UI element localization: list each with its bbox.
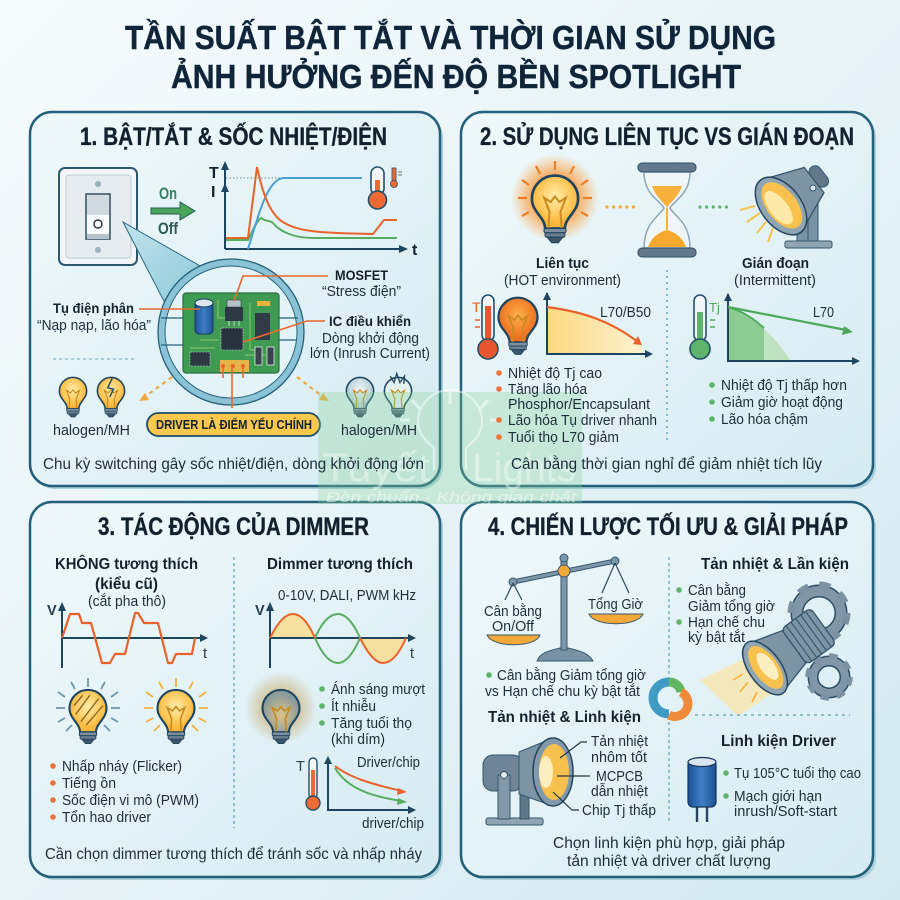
watermark: Tuyết (322, 446, 430, 490)
label: intermittent: Gián đoạn (742, 255, 809, 272)
list: intermittent effects: Lão hóa chậm (721, 412, 808, 428)
label: halogen/MH right: halogen/MH (341, 423, 417, 439)
label: continuous: Liên tục (536, 255, 589, 272)
list: driver parts (723, 766, 861, 820)
label: control IC: lớn (Inrush Current) (310, 346, 430, 362)
magnifier with driver board (158, 259, 304, 405)
list: continuous effects (496, 366, 657, 446)
icon: gears (791, 585, 850, 698)
label: MOSFET: “Stress điện” (322, 284, 401, 300)
subheading: compatible: Dimmer tương thích (267, 556, 413, 573)
watermark: Lights (472, 446, 576, 490)
chart: temperature and current over time: t (412, 242, 418, 259)
label: MOSFET (322, 267, 401, 300)
arrow: on off: Off (158, 219, 178, 238)
chart: chopped waveform: V (47, 603, 57, 619)
list: continuous effects: Lão hóa Tụ driver nhanh (508, 413, 657, 429)
label: intermittent: (Intermittent) (734, 273, 816, 289)
dots green (700, 205, 727, 209)
chart: temperature and current over time (209, 161, 418, 259)
text: balance note (485, 667, 646, 700)
list: compatible benefits: (khi dím) (331, 732, 385, 748)
label: control IC (310, 313, 430, 362)
list: heat strategy (676, 582, 775, 646)
list: incompatible effects: Sốc điện vi mô (PWM) (62, 793, 199, 809)
label: MOSFET: MOSFET (335, 267, 388, 283)
list: intermittent effects: Nhiệt độ Tj thấp hơn (721, 378, 847, 394)
callout wedge (123, 222, 202, 307)
icon: cool thermometer: Tj (709, 300, 720, 315)
text: balance note: Cân bằng Giảm tổng giờ (497, 667, 646, 684)
heading 3: 3. TÁC ĐỘNG CỦA DIMMER (98, 511, 369, 541)
list: heat strategy: Hạn chế chu (688, 615, 765, 631)
chart: smooth waveform: t (410, 646, 414, 662)
icon: glowing bulb (511, 154, 599, 243)
chart: temperature and current over time: T (209, 165, 219, 182)
panel 3: dimmer (30, 502, 443, 880)
lamp labels: Chip Tj thấp (582, 803, 656, 819)
list: compatible benefits: Tăng tuổi thọ (331, 716, 412, 732)
icon: flickering bulb (56, 678, 120, 744)
icon: hourglass (638, 163, 696, 257)
badge: driver weak point (147, 413, 320, 436)
chart: L70 (724, 293, 860, 365)
chart: smooth waveform: V (255, 603, 265, 619)
panel 1: on/off shock (30, 112, 443, 489)
footer 4: Chọn linh kiện phù hợp, giải pháp (553, 835, 785, 852)
lamp labels: MCPCB (596, 769, 643, 785)
icon: hot thermometer: T (472, 299, 481, 315)
subheading: incompatible (55, 554, 198, 610)
icon: dimmed bulb (245, 672, 317, 744)
label: intermittent (734, 255, 816, 289)
list: compatible benefits (319, 681, 425, 748)
list: intermittent effects (709, 378, 847, 428)
chart: L70/B50 (543, 292, 653, 358)
icon: halogen bulbs broken (346, 374, 412, 417)
list: continuous effects: Tăng lão hóa (508, 382, 588, 398)
list: continuous effects: Phosphor/Encapsulant (508, 397, 650, 413)
list: driver parts: Mạch giới hạn (734, 789, 822, 805)
chart: driver/chip temperature: Driver/chip (357, 755, 420, 771)
icon: balance scale: On/Off (492, 619, 535, 635)
footer 2: Cân bằng thời gian nghỉ để giảm nhiệt tích lũy (511, 454, 822, 473)
icon: bright bulb (144, 678, 208, 744)
list: incompatible effects: Nhấp nháy (Flicker) (62, 759, 182, 775)
list: compatible benefits: Ít nhiễu (331, 698, 376, 715)
watermark: Đèn chuẩn - Không gian chất (326, 489, 577, 506)
icon: halogen bulbs ok (53, 377, 130, 439)
chart: temperature and current over time: I (211, 184, 215, 201)
lamp labels: dẫn nhiệt (591, 783, 648, 800)
footer 4: tản nhiệt và driver chất lượng (567, 853, 771, 870)
label: control IC: IC điều khiển (329, 313, 411, 329)
icon: balance scale (484, 554, 643, 661)
icon: balance scale: Tổng Giờ (588, 597, 643, 613)
arrow: on off (151, 184, 195, 238)
list: incompatible effects: Tiếng ồn (62, 776, 116, 792)
icon: balance scale: Cân bằng (484, 603, 542, 620)
icon: hot thermometer (472, 295, 498, 359)
title (125, 19, 776, 95)
subheading: incompatible: (cắt pha thô) (88, 593, 166, 610)
dashed arrows (139, 377, 329, 401)
subheading: heat top right: Tản nhiệt & Lần kiện (701, 556, 849, 573)
chart: chopped waveform: t (203, 646, 207, 662)
chart: driver/chip temperature: driver/chip (362, 816, 424, 832)
icon: thermometers (368, 167, 402, 209)
panel 2: continuous vs intermittent (461, 112, 876, 489)
lamp labels (553, 734, 656, 819)
list: driver parts: inrush/Soft-start (734, 804, 837, 820)
subheading: driver parts: Linh kiện Driver (721, 733, 836, 750)
heading 1: 1. BẬT/TẮT & SỐC NHIỆT/ĐIỆN (80, 121, 387, 151)
lamp labels: Tản nhiệt (591, 734, 648, 750)
label: capacitor (37, 300, 151, 334)
badge: driver weak point: DRIVER LÀ ĐIỂM YẾU CHÍNH (156, 417, 312, 432)
list: heat strategy: Giảm tổng giờ (688, 599, 775, 615)
arrow: on off: On (159, 184, 177, 203)
title: ẢNH HƯỞNG ĐẾN ĐỘ BỀN SPOTLIGHT (171, 57, 741, 95)
text: balance note: vs Hạn chế chu kỳ bật tắt (485, 683, 640, 700)
list: heat strategy: kỳ bật tắt (688, 629, 745, 646)
subheading: incompatible: (kiểu cũ) (95, 575, 158, 593)
subheading: compatible: 0-10V, DALI, PWM kHz (278, 588, 416, 604)
list: intermittent effects: Giảm giờ hoạt động (721, 395, 843, 411)
subheading: compatible (267, 556, 416, 604)
callout leaders (139, 276, 328, 408)
dots orange (607, 205, 634, 209)
watermark (318, 390, 582, 506)
list: continuous effects: Nhiệt độ Tj cao (508, 366, 602, 382)
subheading: heat and parts: Tản nhiệt & Linh kiện (488, 709, 641, 726)
chart: chopped waveform (47, 602, 208, 668)
footer 4 (553, 835, 785, 870)
list: incompatible effects (50, 759, 199, 826)
list: continuous effects: Tuổi thọ L70 giảm (508, 430, 619, 446)
icon: cycle ring (653, 682, 688, 716)
list: driver parts: Tụ 105°C tuổi thọ cao (734, 766, 861, 782)
label: capacitor: “Nạp nạp, lão hóa” (37, 318, 151, 334)
chart: smooth waveform (255, 602, 416, 668)
chart: driver/chip temperature: T (296, 759, 305, 775)
title: TẦN SUẤT BẬT TẮT VÀ THỜI GIAN SỬ DỤNG (125, 19, 776, 56)
icon: spotlight with beam (700, 601, 841, 716)
icon: cool thermometer (690, 295, 720, 359)
list: compatible benefits: Ánh sáng mượt (331, 681, 425, 698)
icon: hot orange bulb (498, 298, 538, 354)
list: incompatible effects: Tổn hao driver (62, 810, 151, 826)
label: continuous (504, 255, 621, 289)
label: continuous: (HOT environment) (504, 273, 621, 289)
list: heat strategy: Cân bằng (688, 582, 746, 599)
subheading: incompatible: KHÔNG tương thích (55, 554, 198, 573)
icon: lamp cross section (483, 738, 573, 825)
icon: halogen bulbs ok: halogen/MH (53, 423, 130, 439)
chart: L70/B50: L70/B50 (600, 305, 651, 321)
chart: driver/chip temperature (296, 755, 424, 832)
icon: wall switch (59, 168, 137, 265)
panel 4: strategy (461, 502, 876, 880)
label: capacitor: Tụ điện phân (53, 300, 134, 316)
lamp labels: nhôm tốt (591, 750, 647, 766)
label: control IC: Dòng khởi động (322, 331, 419, 347)
chart: L70: L70 (813, 305, 834, 321)
footer 1: Chu kỳ switching gây sốc nhiệt/điện, dòng khởi động lớn (43, 456, 424, 473)
icon: spotlight (740, 147, 844, 248)
footer 3: Cần chọn dimmer tương thích để tránh sốc và nhấp nháy (45, 845, 422, 863)
icon: capacitor (688, 758, 716, 822)
